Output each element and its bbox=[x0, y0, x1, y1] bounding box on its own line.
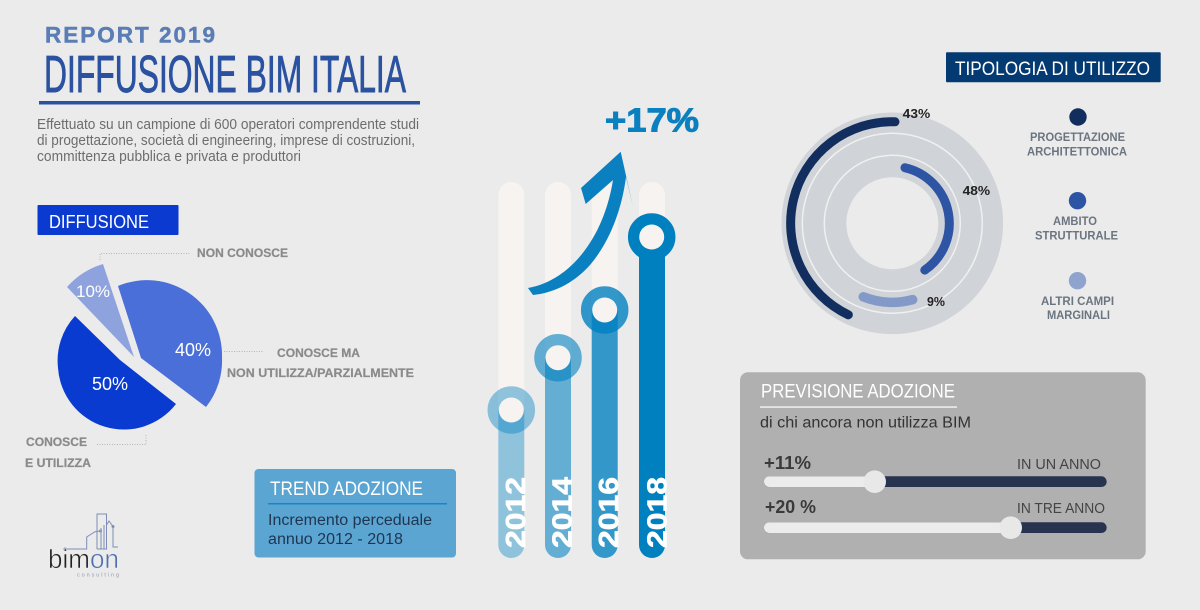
logo: bimon consulting: consulting bbox=[77, 572, 119, 578]
legend: altri campi marginali bbox=[1041, 272, 1114, 322]
label: non conosce: NON CONOSCE bbox=[197, 248, 288, 260]
callout: trend adozione: Incremento perceduale bbox=[268, 512, 432, 529]
panel: previsione adozione bbox=[740, 372, 1146, 559]
stat: +17%: +17% bbox=[605, 102, 699, 139]
slider: +20% in tre anno bbox=[764, 497, 1107, 539]
intro text bbox=[37, 117, 419, 165]
section heading: diffusione bbox=[38, 205, 178, 235]
value: 48%: 48% bbox=[963, 184, 990, 198]
header: report title block bbox=[37, 22, 420, 165]
legend: altri campi marginali: ALTRI CAMPI bbox=[1041, 294, 1114, 308]
slider: +11% in un anno: IN UN ANNO bbox=[1017, 457, 1101, 473]
legend: progettazione architettonica bbox=[1027, 108, 1127, 159]
panel: diffusione pie chart bbox=[25, 205, 414, 470]
label: conosce ma non utilizza: CONOSCE MA bbox=[277, 348, 360, 360]
legend: ambito strutturale: STRUTTURALE bbox=[1035, 228, 1118, 242]
section heading: tipologia di utilizzo bbox=[946, 52, 1161, 82]
label: conosce ma non utilizza: NON UTILIZZA/PARZIALMENTE bbox=[227, 368, 414, 380]
slider: +11% in un anno: +11% bbox=[764, 453, 811, 473]
pie slice: 40% conosce ma non utilizza bbox=[118, 280, 222, 407]
bar: 2016: 2016 bbox=[593, 477, 624, 548]
intro text: committenza pubblica e privata e produttori bbox=[37, 149, 301, 165]
title: diffusione BIM Italia: DIFFUSIONE BIM ITALIA bbox=[44, 46, 406, 104]
section heading: diffusione: DIFFUSIONE bbox=[49, 211, 149, 232]
arrow: upward trend bbox=[528, 152, 633, 295]
chart: radial donut bbox=[782, 107, 1003, 334]
intro text: Effettuato su un campione di 600 operatori comprendente studi bbox=[37, 117, 419, 133]
legend: progettazione architettonica: PROGETTAZIONE bbox=[1030, 130, 1125, 144]
legend: progettazione architettonica: ARCHITETTONICA bbox=[1027, 145, 1127, 159]
legend: ambito strutturale: AMBITO bbox=[1053, 214, 1097, 228]
bar: 2016 bbox=[587, 182, 624, 558]
slider: +20% in tre anno: IN TRE ANNO bbox=[1017, 501, 1105, 517]
callout: trend adozione bbox=[254, 469, 456, 558]
panel heading: PREVISIONE ADOZIONE bbox=[761, 382, 955, 403]
pie slice: 40% conosce ma non utilizza: 40% bbox=[175, 340, 211, 360]
bar: 2012 bbox=[493, 182, 531, 558]
callout: trend adozione: annuo 2012 - 2018 bbox=[268, 531, 403, 548]
bar: 2014 bbox=[540, 182, 578, 558]
pie slice: 10% non conosce bbox=[67, 264, 134, 357]
heading: report 2019: REPORT 2019 bbox=[45, 22, 215, 48]
value: 43%: 43% bbox=[903, 107, 930, 121]
label: conosce e utilizza: E UTILIZZA bbox=[25, 458, 91, 470]
bar: 2012: 2012 bbox=[500, 477, 531, 548]
intro text: di progettazione, società di engineering, imprese di costruzioni, bbox=[37, 133, 415, 149]
bar: 2018 bbox=[634, 182, 673, 558]
label: conosce ma non utilizza bbox=[227, 348, 414, 380]
logo: bimon consulting bbox=[48, 514, 119, 578]
title underline bbox=[39, 101, 420, 104]
value: 9%: 9% bbox=[927, 295, 945, 309]
logo: bimon consulting: bimon bbox=[48, 546, 119, 574]
pie slice: 50% conosce e utilizza bbox=[58, 316, 176, 430]
chart: trend bars bbox=[493, 102, 699, 558]
legend: ambito strutturale bbox=[1035, 192, 1118, 242]
legend: altri campi marginali: MARGINALI bbox=[1047, 308, 1110, 322]
bar: 2018: 2018 bbox=[642, 477, 673, 548]
label: conosce e utilizza: CONOSCE bbox=[26, 437, 87, 449]
pie slice: 50% conosce e utilizza: 50% bbox=[92, 374, 128, 394]
pie slice: 10% non conosce: 10% bbox=[76, 282, 110, 301]
slider: +20% in tre anno: +20 % bbox=[765, 497, 816, 517]
panel: tipologia di utilizzo bbox=[782, 52, 1161, 334]
panel subtitle: di chi ancora non utilizza BIM bbox=[760, 415, 971, 432]
slider: +11% in un anno bbox=[764, 453, 1107, 493]
bar: 2014: 2014 bbox=[547, 477, 578, 548]
label: conosce e utilizza bbox=[25, 437, 91, 470]
section heading: tipologia di utilizzo: TIPOLOGIA DI UTILIZZO bbox=[955, 58, 1150, 80]
callout: trend adozione: TREND ADOZIONE bbox=[270, 479, 423, 500]
